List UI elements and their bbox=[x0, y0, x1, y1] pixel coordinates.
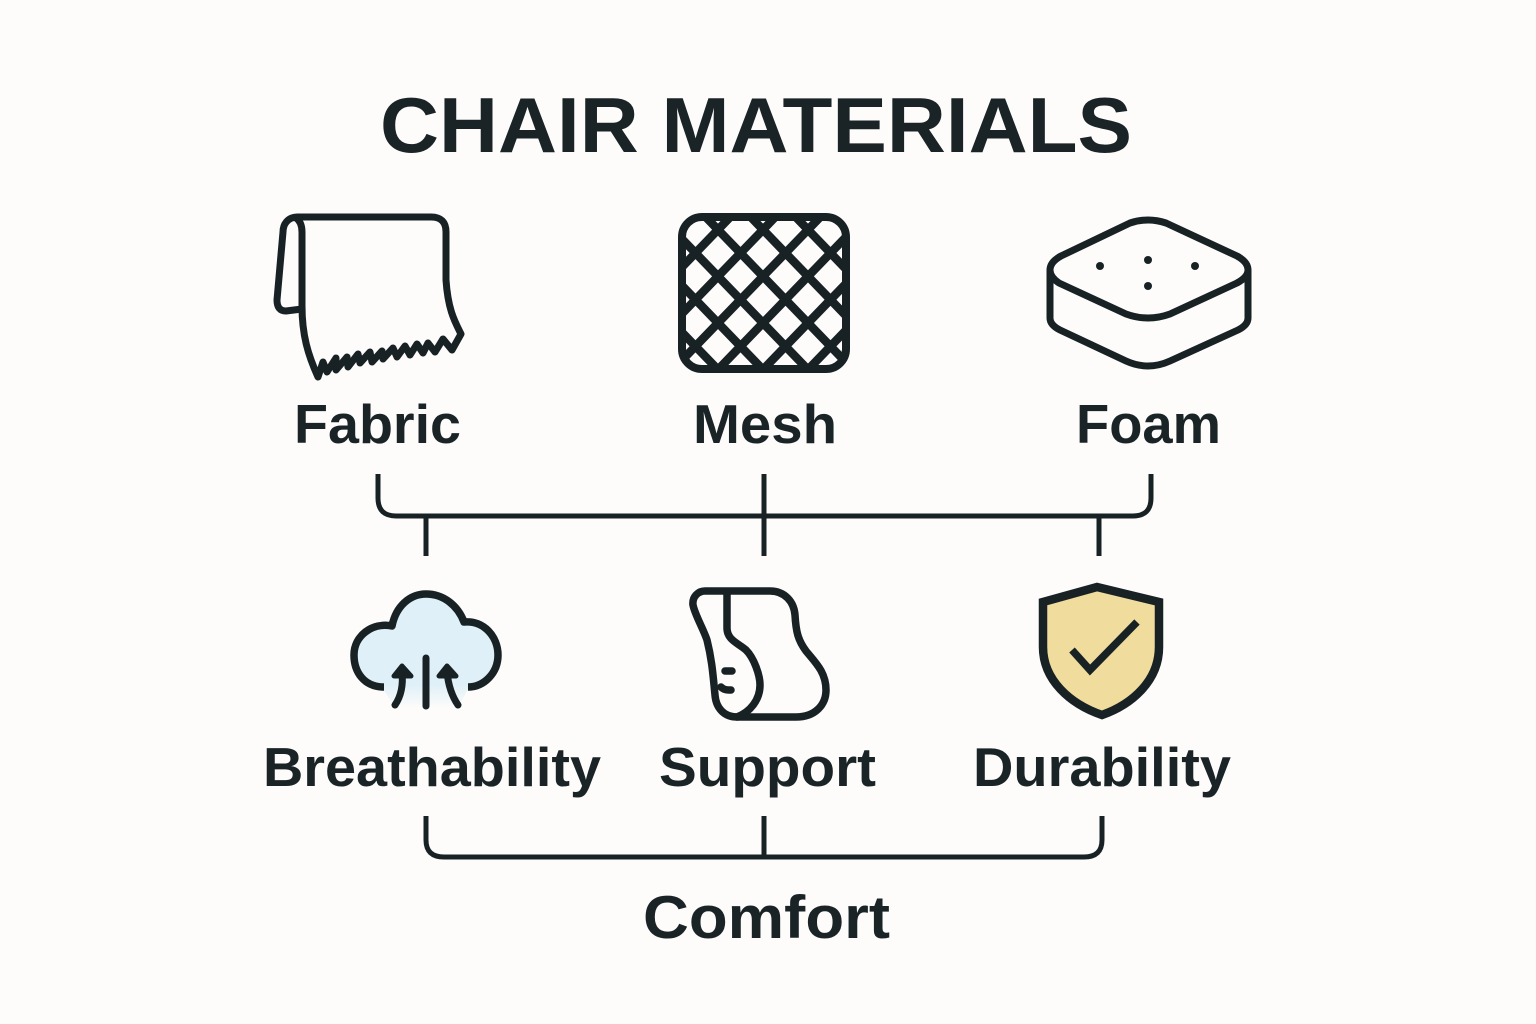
title: CHAIR MATERIALS bbox=[380, 81, 1132, 169]
label: mesh: Mesh bbox=[693, 393, 837, 455]
icon: breathability cloud bbox=[354, 594, 498, 708]
icon: durability shield bbox=[1043, 587, 1159, 715]
label: comfort: Comfort bbox=[643, 884, 890, 951]
label: foam: Foam bbox=[1076, 393, 1221, 455]
bracket: materials to properties bbox=[378, 474, 1151, 556]
label: breathability: Breathability bbox=[263, 736, 601, 798]
label: fabric: Fabric bbox=[294, 393, 461, 455]
icon: mesh bbox=[678, 213, 850, 373]
icon: foam bbox=[1050, 220, 1248, 366]
bracket: properties to comfort bbox=[426, 816, 1102, 857]
label: durability: Durability bbox=[973, 736, 1231, 798]
label: support: Support bbox=[659, 736, 876, 798]
icon: fabric bbox=[277, 217, 461, 377]
icon: support cushion bbox=[693, 591, 826, 717]
